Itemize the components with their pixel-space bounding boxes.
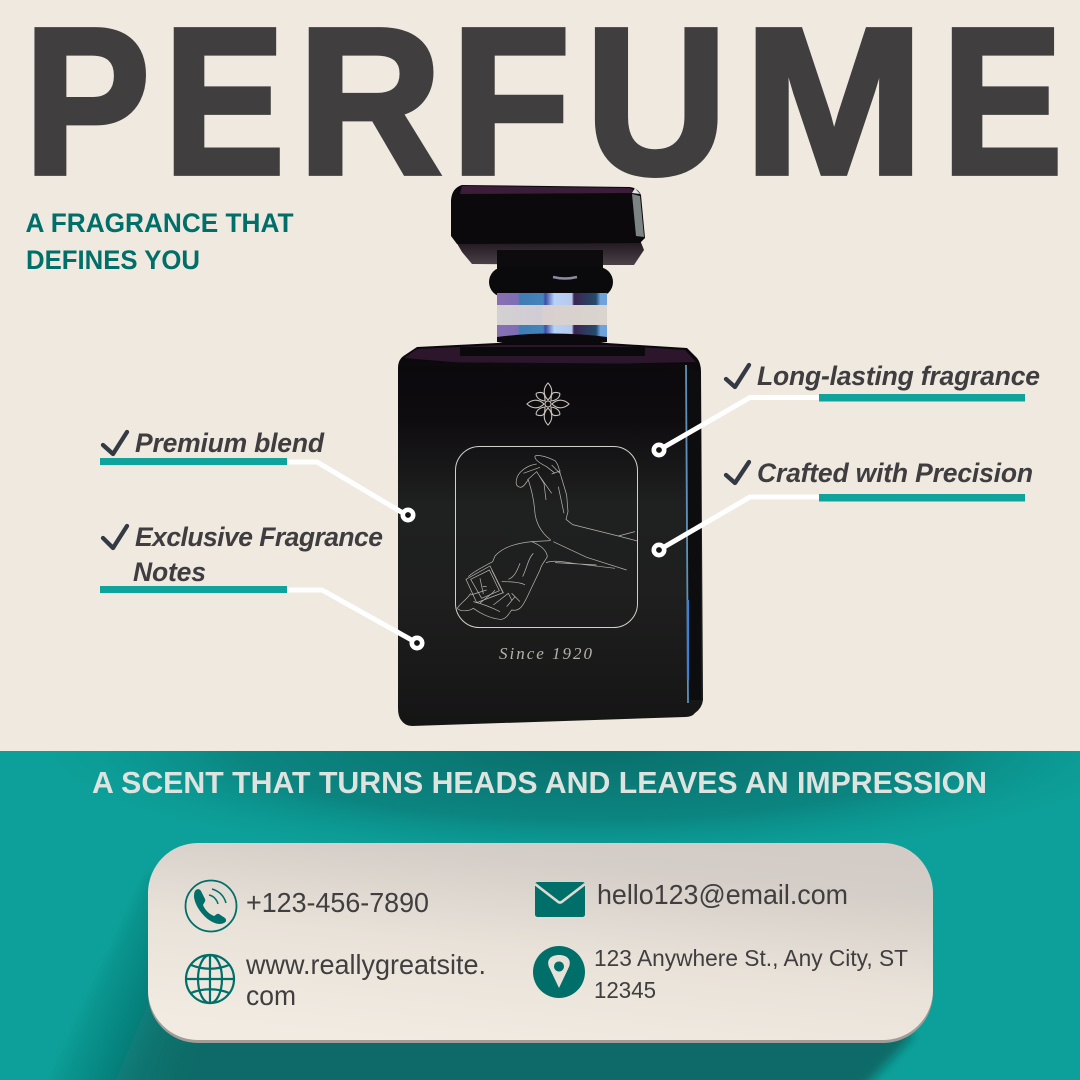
panel: contact card (148, 843, 933, 1043)
address: 123 Anywhere St., Any City, ST (594, 945, 908, 971)
website (245, 949, 486, 1011)
icon: globe (186, 955, 234, 1003)
perfume bottle (398, 185, 703, 726)
bottle body (398, 343, 703, 726)
address (594, 945, 908, 1003)
bottle shoulder (400, 345, 696, 369)
panel: teal footer band (0, 745, 1080, 1080)
callout: long-lasting fragrance (654, 361, 1040, 455)
bottle cap (451, 185, 645, 265)
glass highlight (686, 365, 701, 703)
subtitle (26, 208, 294, 275)
callout: exclusive fragrance notes: Exclusive Fragrance (135, 522, 383, 552)
callout: premium blend: Premium blend (135, 428, 325, 458)
bottle neck (497, 250, 603, 272)
callout: crafted with precision (654, 458, 1033, 555)
email: hello123@email.com (597, 879, 848, 910)
callout: exclusive fragrance notes: Notes (133, 557, 206, 587)
subtitle: DEFINES YOU (26, 245, 200, 275)
icon: phone (186, 880, 236, 932)
callout: crafted with precision: Crafted with Precision (757, 458, 1033, 488)
icon: envelope (535, 882, 585, 917)
tagline: A SCENT THAT TURNS HEADS AND LEAVES AN IMPRESSION (92, 765, 987, 800)
phone number: +123-456-7890 (246, 887, 429, 918)
callout: long-lasting fragrance: Long-lasting fragrance (757, 361, 1040, 391)
website: com (246, 980, 296, 1011)
since 1920: Since 1920 (499, 644, 592, 663)
neck ring (489, 267, 613, 297)
callout: exclusive fragrance notes (100, 522, 422, 648)
metallic collar (497, 293, 607, 347)
hand line art (457, 455, 637, 619)
address: 12345 (594, 977, 656, 1003)
subtitle: A FRAGRANCE THAT (26, 208, 294, 238)
label frame (456, 446, 638, 628)
callout: premium blend (100, 428, 413, 520)
emblem (527, 383, 569, 425)
icon: location pin (533, 946, 585, 998)
website: www.reallygreatsite. (245, 949, 486, 980)
